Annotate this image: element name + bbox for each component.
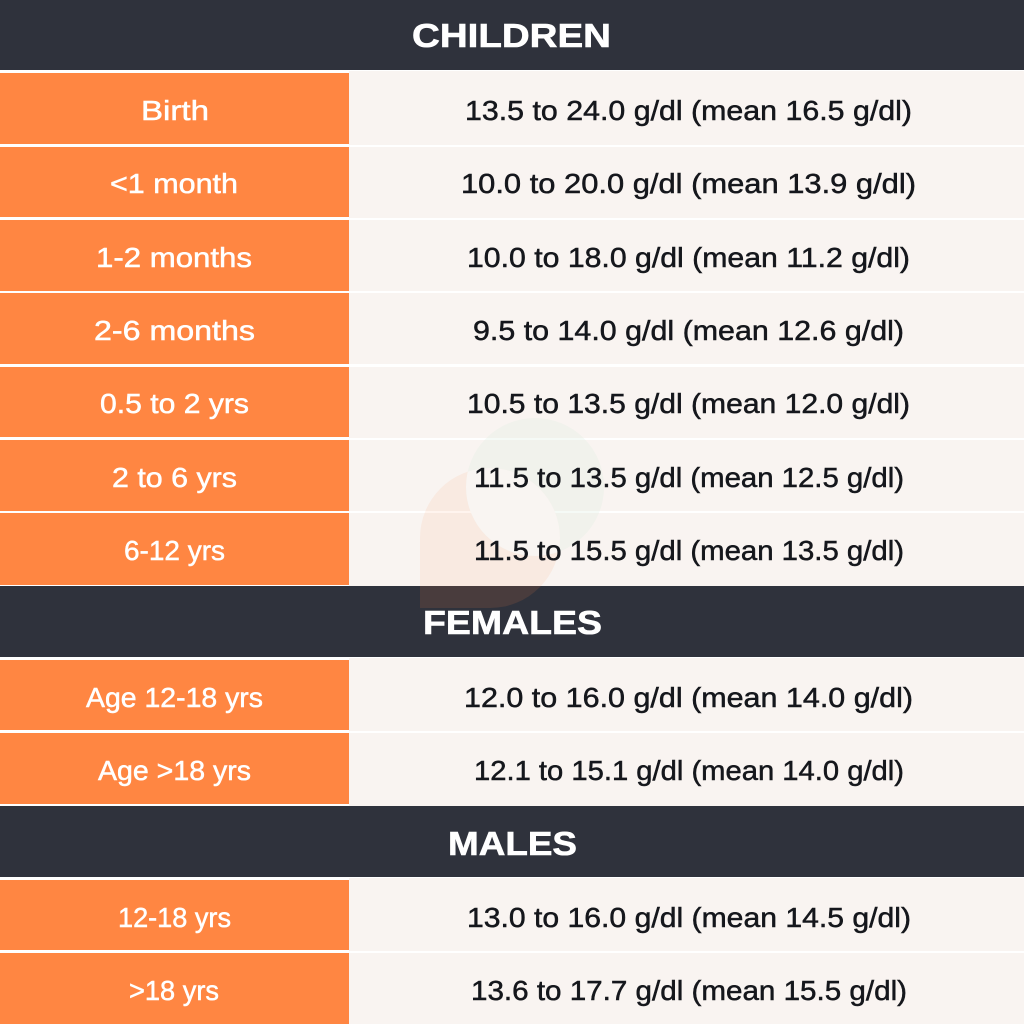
row: age 12-18 yrs (0, 658, 1024, 731)
heading: children (0, 0, 1024, 70)
watermark logo (420, 418, 604, 608)
heading: females (0, 586, 1024, 657)
row: 6-12 yrs: 6-12 yrs (124, 535, 225, 566)
row: 1-2 months (0, 220, 1024, 291)
row: over 18 yrs (0, 953, 1024, 1024)
row: under 1 month (0, 147, 1024, 218)
row: birth: Birth (141, 95, 209, 126)
row: over 18 yrs: 13.6 to 17.7 g/dl (mean 15.5 g/dl) (471, 975, 907, 1006)
heading: children: CHILDREN (412, 17, 611, 54)
row: age 12-18 yrs: 12.0 to 16.0 g/dl (mean 14.0 g/dl) (464, 682, 913, 713)
value text: 2 to 6 yrs: 11.5 to 13.5 g/dl (mean 12.5 g/dl) (474, 462, 904, 493)
row: age over 18 yrs: 12.1 to 15.1 g/dl (mean 14.0 g/dl) (474, 755, 904, 786)
row: 12-18 yrs: 13.0 to 16.0 g/dl (mean 14.5 g/dl) (467, 902, 911, 933)
row: under 1 month: <1 month (110, 168, 238, 199)
row: over 18 yrs: >18 yrs (129, 975, 219, 1006)
row: 12-18 yrs (0, 878, 1024, 951)
heading: males (0, 806, 1024, 877)
row: 12-18 yrs: 12-18 yrs (118, 902, 231, 933)
row: 0.5 to 2 yrs: 10.5 to 13.5 g/dl (mean 12.0 g/dl) (467, 388, 910, 419)
panel: males (0, 806, 1024, 1024)
panel: females (0, 586, 1024, 806)
row: birth: 13.5 to 24.0 g/dl (mean 16.5 g/dl) (465, 95, 912, 126)
row: 1-2 months: 1-2 months (96, 242, 252, 273)
row: 2 to 6 yrs: 2 to 6 yrs (112, 462, 237, 493)
row: age 12-18 yrs: Age 12-18 yrs (86, 682, 263, 713)
row: 2 to 6 yrs (0, 440, 1024, 511)
panel: children (0, 0, 1024, 586)
row: 0.5 to 2 yrs (0, 367, 1024, 438)
row: 2-6 months: 2-6 months (94, 315, 255, 346)
row: 2-6 months (0, 293, 1024, 364)
row: age over 18 yrs (0, 733, 1024, 806)
row: 6-12 yrs (0, 513, 1024, 586)
row: age over 18 yrs: Age >18 yrs (98, 755, 251, 786)
row: under 1 month: 10.0 to 20.0 g/dl (mean 13.9 g/dl) (461, 168, 916, 199)
row: birth (0, 71, 1024, 145)
row: 0.5 to 2 yrs: 0.5 to 2 yrs (100, 388, 249, 419)
heading: males: MALES (448, 825, 577, 862)
heading: females: FEMALES (423, 604, 602, 641)
row: 2-6 months: 9.5 to 14.0 g/dl (mean 12.6 g/dl) (473, 315, 904, 346)
value text: 6-12 yrs: 11.5 to 15.5 g/dl (mean 13.5 g/dl) (474, 535, 904, 566)
row: 1-2 months: 10.0 to 18.0 g/dl (mean 11.2 g/dl) (467, 242, 910, 273)
